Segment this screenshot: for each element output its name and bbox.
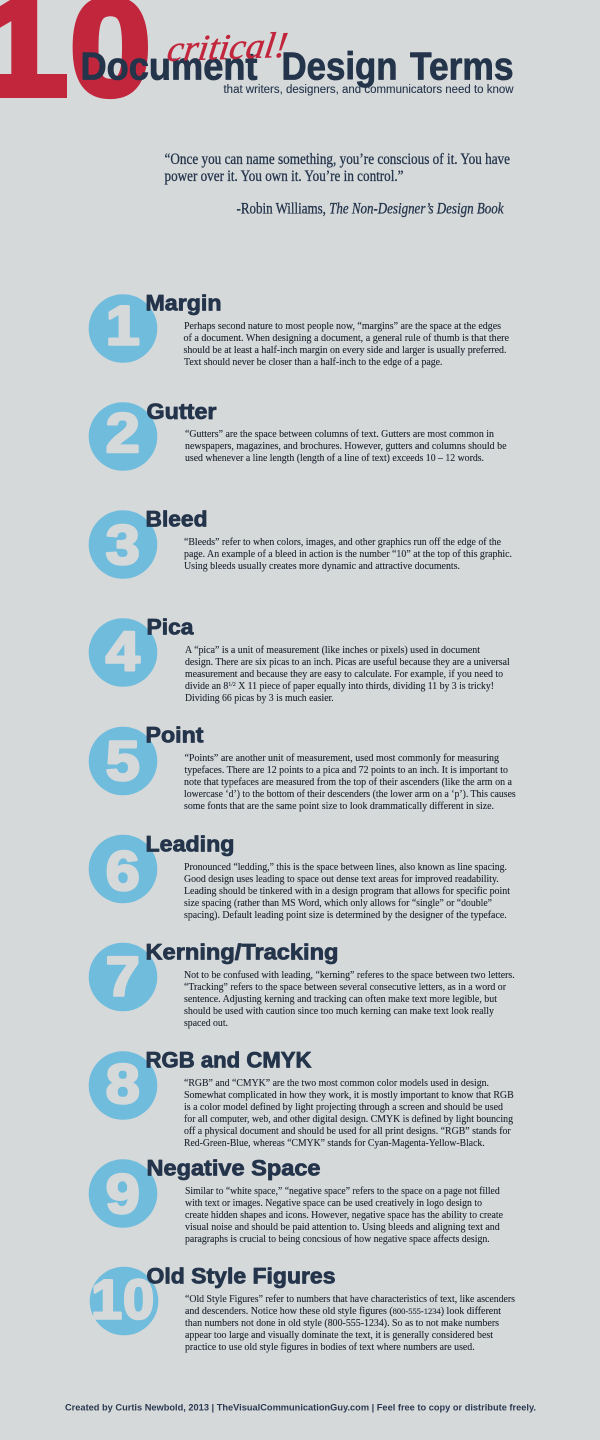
big number 10 bleeding off the page xyxy=(0,0,151,125)
badge 4 xyxy=(89,618,157,687)
description Kerning/Tracking: “Tracking” refers to the space between several consecutive letters, as in a word or xyxy=(184,982,507,993)
description RGB and CMYK: off a physical document and should be used for all print designs. “RGB” stands for xyxy=(184,1126,511,1137)
description Leading: Pronounced “ledding,” this is the space between lines, also known as line spacing. xyxy=(184,862,507,873)
title: Terms xyxy=(410,46,514,88)
description Kerning/Tracking: spaced out. xyxy=(184,1018,228,1029)
description Kerning/Tracking xyxy=(184,970,515,1029)
description Pica: X 11 piece of paper equally into thirds, dividing 11 by 3 is tricky! xyxy=(236,681,494,692)
description Negative Space: create hidden shapes and icons. However, negative space has the ability to create xyxy=(185,1210,504,1221)
description Margin: of a document. When designing a document, a general rule of thumb is that there xyxy=(184,333,510,344)
badge 1 xyxy=(89,294,157,363)
badge 5 xyxy=(89,727,157,795)
description Point: some fonts that are the same point size to look drammatically different in size. xyxy=(184,801,494,812)
badge 3: 3 xyxy=(106,513,140,576)
term 7: Kerning/Tracking xyxy=(89,940,515,1029)
description Gutter: newspapers, magazines, and brochures. However, gutters and columns should be xyxy=(185,441,507,452)
description Pica xyxy=(185,645,510,704)
term 4: Pica xyxy=(89,614,510,704)
description Gutter: used whenever a line length (length of a line of text) exceeds 10 – 12 words. xyxy=(185,453,484,464)
badge 9: 9 xyxy=(106,1162,140,1225)
title: Document xyxy=(80,46,258,88)
description RGB and CMYK: Red-Green-Blue, whereas “CMYK” stands for Cyan-Magenta-Yellow-Black. xyxy=(184,1138,485,1149)
description Point: lowercase ‘d’) to the bottom of their descenders (the lower arm on a ‘p’). This causes xyxy=(184,789,516,800)
term 8: RGB and CMYK xyxy=(89,1048,514,1149)
description Margin: should be at least a half-inch margin on every side and larger is usually preferred. xyxy=(184,345,506,356)
critical script word: critical! xyxy=(165,25,290,69)
description Old Style Figures xyxy=(185,1294,515,1353)
description Bleed: Using bleeds usually creates more dynamic and attractive documents. xyxy=(184,561,460,572)
description Leading: size spacing (rather than MS Word, which only allows for “single” or “double” xyxy=(184,898,492,909)
badge 5: 5 xyxy=(106,729,140,792)
heading Bleed: Bleed xyxy=(146,506,208,532)
quote: -Robin Williams, The Non-Designer’s Design Book xyxy=(236,200,504,218)
term 2: Gutter xyxy=(89,399,507,471)
description Pica: Dividing 66 picas by 3 is much easier. xyxy=(185,693,334,704)
description Old Style Figures: “Old Style Figures” refer to numbers that have characteristics of text, like ascenders xyxy=(185,1294,515,1305)
description Margin: Text should never be closer than a half-inch to the edge of a page. xyxy=(184,357,442,368)
badge 2 xyxy=(89,401,157,471)
description Kerning/Tracking: Not to be confused with leading, “kerning” referes to the space between two letters. xyxy=(184,970,515,981)
quote: “Once you can name something, you’re conscious of it. You have xyxy=(164,151,510,168)
description Kerning/Tracking: sentence. Adjusting kerning and tracking can often make text more legible, but xyxy=(184,994,497,1005)
description Point xyxy=(184,753,516,812)
badge 8 xyxy=(89,1051,157,1120)
description Leading: Leading should be tinkered with in a design program that allows for specific point xyxy=(184,886,510,897)
description Pica: 1/2 xyxy=(228,682,236,688)
heading Kerning/Tracking: Kerning/Tracking xyxy=(146,940,338,964)
term 9: Negative Space xyxy=(89,1156,504,1245)
heading RGB and CMYK: RGB and CMYK xyxy=(146,1048,312,1072)
badge 2: 2 xyxy=(106,401,140,464)
description RGB and CMYK: “RGB” and “CMYK” are the two most common color models used in design. xyxy=(184,1078,489,1089)
description RGB and CMYK: Somewhat complicated in how they work, it is mostly important to know that RGB xyxy=(184,1090,514,1101)
description Old Style Figures: practice to use old style figures in bodies of text where numbers are used. xyxy=(185,1342,475,1353)
heading Gutter: Gutter xyxy=(146,399,217,424)
title: Design xyxy=(282,46,398,88)
description Gutter: “Gutters” are the space between columns of text. Gutters are most common in xyxy=(185,429,494,440)
badge 10: 1 xyxy=(91,1268,122,1331)
quote xyxy=(164,151,510,218)
badge 3 xyxy=(89,510,157,579)
description Pica: measurement and because they are easy to calculate. For example, if you need to xyxy=(185,669,503,680)
badge 1: 1 xyxy=(106,294,140,356)
description RGB and CMYK: is a color model defined by light projecting through a screen and should be used xyxy=(184,1102,503,1113)
badge 6 xyxy=(89,835,157,903)
description Pica: design. There are six picas to an inch. Picas are useful because they are a universal xyxy=(185,657,510,668)
description Negative Space: Similar to “white space,” “negative space” refers to the space on a page not filled xyxy=(185,1186,500,1197)
description Negative Space: paragraphs is crucial to being concsious of how negative space affects design. xyxy=(185,1234,490,1245)
description Gutter xyxy=(185,429,507,464)
description Point: “Points” are another unit of measurement, used most commonly for measuring xyxy=(184,753,499,764)
description Old Style Figures: than numbers not done in old style (800-555-1234). So as to not make numbers xyxy=(185,1318,499,1329)
description Point: note that typefaces are measured from the top of their ascenders (like the arm on a xyxy=(184,777,513,788)
description Negative Space: visual noise and should be paid attention to. Using bleeds and aligning text and xyxy=(185,1222,500,1233)
description Margin: Perhaps second nature to most people now, “margins” are the space at the edges xyxy=(184,321,501,332)
description Negative Space: with text or images. Negative space can be used creatively in logo design to xyxy=(185,1198,482,1209)
badge 4: 4 xyxy=(106,620,140,682)
badge 7 xyxy=(89,943,157,1011)
description Margin xyxy=(184,321,510,368)
badge 8: 8 xyxy=(106,1052,140,1115)
term 10: Old Style Figures xyxy=(90,1264,515,1353)
badge 9 xyxy=(89,1159,157,1228)
badge 7: 7 xyxy=(106,944,140,1008)
description Pica: A “pica” is a unit of measurement (like inches or pixels) used in document xyxy=(185,645,480,656)
description Old Style Figures: appear too large and visually dominate the text, it is generally considered best xyxy=(185,1330,493,1341)
heading Margin: Margin xyxy=(146,290,222,316)
badge 10 xyxy=(90,1267,158,1335)
heading Leading: Leading xyxy=(146,832,234,856)
heading Negative Space: Negative Space xyxy=(146,1156,320,1180)
term 6: Leading xyxy=(89,832,510,921)
description Leading: Good design uses leading to space out dense text areas for improved readability. xyxy=(184,874,499,885)
description Bleed xyxy=(184,537,512,572)
badge 10: 0 xyxy=(123,1268,154,1331)
description RGB and CMYK: for all computer, web, and other digital design. CMYK is defined by light bouncing xyxy=(184,1114,513,1125)
description Old Style Figures: and descenders. Notice how these old style figures (800-555-1234) look different xyxy=(185,1306,501,1317)
description Negative Space xyxy=(185,1186,504,1245)
heading Old Style Figures: Old Style Figures xyxy=(146,1264,336,1288)
description Leading xyxy=(184,862,510,921)
header xyxy=(0,0,514,125)
footer credit: Created by Curtis Newbold, 2013 | TheVisualCommunicationGuy.com | Feel free to copy or distribute freely. xyxy=(65,1402,536,1414)
description Bleed: page. An example of a bleed in action is the number “10” at the top of this graphic. xyxy=(184,549,512,560)
term 1: Margin xyxy=(89,290,510,368)
term 5: Point xyxy=(89,722,516,812)
term 3: Bleed xyxy=(89,506,512,579)
heading Pica: Pica xyxy=(146,614,194,640)
description Pica: divide an 8 xyxy=(185,681,229,692)
description RGB and CMYK xyxy=(184,1078,514,1149)
description Kerning/Tracking: should be used with caution since too much kerning can make text look really xyxy=(184,1006,494,1017)
badge 6: 6 xyxy=(106,839,140,902)
description Leading: spacing). Default leading point size is determined by the designer of the typeface. xyxy=(184,910,507,921)
heading Point: Point xyxy=(146,722,204,748)
description Point: typefaces. There are 12 points to a pica and 72 points to an inch. It is important to xyxy=(184,765,508,776)
description Bleed: “Bleeds” refer to when colors, images, and other graphics run off the edge of the xyxy=(184,537,502,548)
subtitle: that writers, designers, and communicators need to know xyxy=(224,84,514,96)
quote: power over it. You own it. You’re in control.” xyxy=(164,168,404,185)
